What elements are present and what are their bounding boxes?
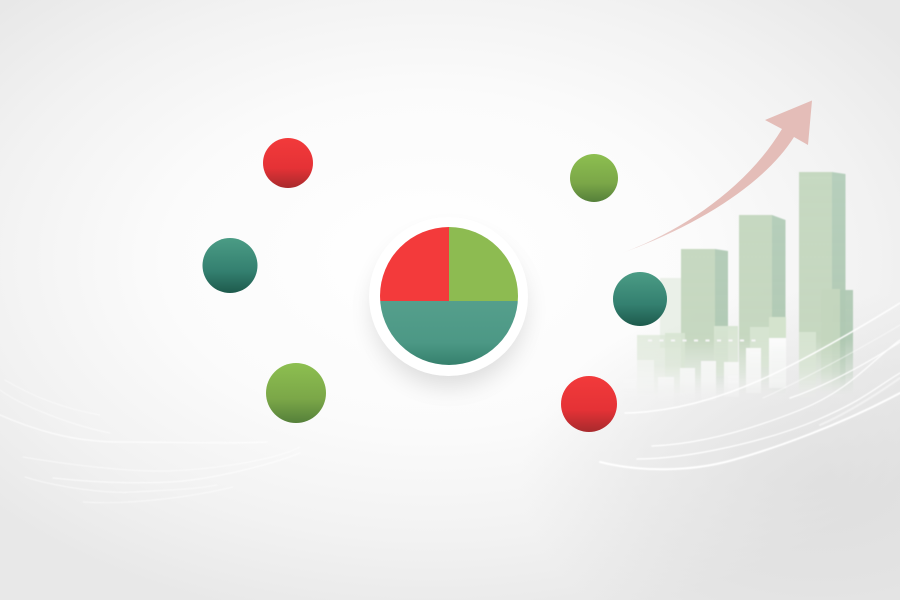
left flowing lines — [0, 380, 300, 503]
sphere: red bottom right — [561, 376, 617, 432]
slice: red quarter — [380, 227, 449, 301]
pie slices — [380, 227, 518, 365]
pie white ring — [369, 217, 528, 376]
growth arrow — [617, 100, 812, 255]
back bars — [660, 172, 846, 395]
pie drop shadow — [373, 234, 525, 386]
growth bar chart — [623, 172, 853, 409]
sphere: teal left — [202, 238, 258, 293]
slice: teal half — [380, 301, 518, 365]
central pie chart — [369, 217, 528, 386]
dotted line — [648, 340, 756, 342]
front green bars — [637, 289, 853, 398]
sphere: red top left — [263, 138, 313, 188]
slice: green quarter — [449, 227, 518, 301]
white foreground bars — [623, 338, 786, 409]
sphere: green bottom left — [266, 363, 326, 423]
sphere: green top right — [570, 154, 618, 202]
right flowing lines — [600, 303, 900, 469]
sphere: teal right — [613, 272, 667, 326]
